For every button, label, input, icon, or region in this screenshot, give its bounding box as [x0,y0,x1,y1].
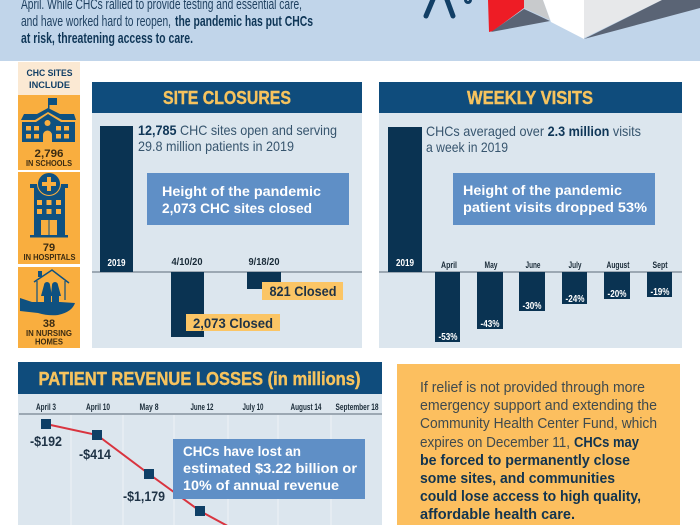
bar: April [435,260,460,343]
hospitals tile: 79 [43,242,55,254]
heading: patient revenue losses [18,362,382,394]
icon: school [21,98,76,142]
schools tile: 2,796 [34,148,64,160]
callout: height of pandemic sites [147,173,349,225]
bar: August [604,260,630,300]
panel: relief warning [397,364,680,525]
bar: July: -24% [566,294,585,305]
bar: 2019 [100,126,133,272]
callout: revenue lost: estimated $3.22 billion or [183,460,358,476]
axis date labels: April 3 [36,402,56,413]
heading: site closures [92,82,362,113]
axis date labels: July 10 [242,402,264,413]
nursing homes tile [18,267,80,348]
bar: May [477,260,503,330]
panel: relief warning: affordable health care. [420,507,575,523]
bar: August: August [606,260,630,271]
heading: patient revenue losses: PATIENT REVENUE LOSSES (in millions) [38,369,360,389]
bar: July: July [568,260,582,271]
heading: site closures: SITE CLOSURES [163,88,291,108]
bar: August: -20% [608,289,627,300]
panel: relief warning: expires on December 11, [420,435,570,451]
heading: weekly visits: WEEKLY VISITS [467,88,593,108]
bar: Sept: Sept [652,260,668,271]
hospitals tile: IN HOSPITALS [24,253,76,262]
bar: June: -30% [522,301,542,312]
axis date labels: June 12 [190,402,214,413]
bar: 9/18/20: 821 Closed [270,283,336,299]
axis date labels: April 10 [86,402,110,413]
nursing homes tile: IN NURSING [26,329,72,338]
bar: Sept [647,260,672,298]
axis date labels: August 14 [290,402,322,413]
text: visits average: a week in 2019 [426,139,508,155]
line chart: revenue losses: -$414 [79,446,111,462]
callout: revenue lost: CHCs have lost an [183,443,301,459]
axis date labels [36,402,378,413]
sidebar heading: INCLUDE [29,80,70,90]
nursing homes tile: 38 [43,318,55,330]
panel: patient revenue losses [18,362,382,525]
axis date labels: September 18 [336,402,378,413]
bar: April: -53% [438,332,458,343]
nursing homes tile: HOMES [35,338,64,346]
text: visits average [426,123,641,155]
sidebar heading [18,62,80,95]
panel: CHC sites include sidebar [18,62,80,348]
panel: relief warning: could lose access to high quality, [420,489,641,505]
callout: revenue lost [173,439,365,499]
bar: April: April [441,260,457,271]
bar: 4/10/20: 2,073 Closed [193,315,273,331]
text: visits average: CHCs averaged over 2.3 million visits [426,123,641,139]
bar: 2019: 2019 [108,258,126,269]
panel: relief warning: emergency support and extending the [420,398,657,414]
line chart: revenue losses [30,419,235,525]
panel: weekly visits [379,82,682,348]
axis date labels: May 8 [140,402,158,413]
panel: relief warning: If relief is not provided through more [420,380,645,396]
callout: height of pandemic visits: Height of the pandemic [463,182,622,198]
intro text: at risk, threatening access to care. [21,30,193,47]
bar: 9/18/20: 9/18/20 [248,257,280,268]
icon: hospital [30,172,68,238]
callout: height of pandemic visits [453,173,655,225]
bar: 2019: 2019 [396,258,414,269]
panel: intro banner [0,0,700,61]
callout: height of pandemic visits: patient visits dropped 53% [463,199,648,215]
text: sites open: 12,785 CHC sites open and serving [138,122,337,138]
bar chart: monthly visit drops [435,260,672,343]
schools tile: IN SCHOOLS [26,159,73,168]
callout: revenue lost: 10% of annual revenue [183,477,339,493]
bar: Sept: -19% [650,287,670,298]
panel: relief warning: Community Health Center Fund, which [420,416,657,432]
sidebar heading: CHC SITES [26,68,72,78]
hospitals tile [18,172,80,264]
schools tile [18,95,80,170]
intro text [21,0,313,47]
text: sites open [138,122,337,154]
callout: height of pandemic sites: Height of the pandemic [162,183,321,199]
bar: 9/18/20 [247,257,343,300]
bar: 2019 [388,127,422,272]
bar: 4/10/20: 4/10/20 [172,257,203,268]
bar: June: June [526,260,540,271]
panel: site closures [92,82,362,348]
heading: weekly visits [379,82,682,113]
panel: relief warning: be forced to permanently close [420,453,630,469]
callout: height of pandemic sites: 2,073 CHC sites closed [162,200,312,216]
bar: 4/10/20 [171,257,280,337]
intro text: and have worked hard to reopen, [21,13,171,30]
line chart: revenue losses: -$192 [30,433,62,449]
panel: relief warning: CHCs may [574,435,639,451]
icon: figure legs [426,0,470,16]
bar: May: -43% [480,319,500,330]
bar: July [562,260,587,305]
bar: May: May [484,260,498,271]
panel: relief warning: some sites, and communities [420,471,615,487]
text: sites open: 29.8 million patients in 2019 [138,138,294,154]
icon: house on hand with people [20,270,75,315]
icon: paper house shapes [488,0,700,39]
bar: June [519,260,545,312]
line chart: revenue losses: -$1,179 [123,488,165,504]
intro text: the pandemic has put CHCs [175,13,313,30]
